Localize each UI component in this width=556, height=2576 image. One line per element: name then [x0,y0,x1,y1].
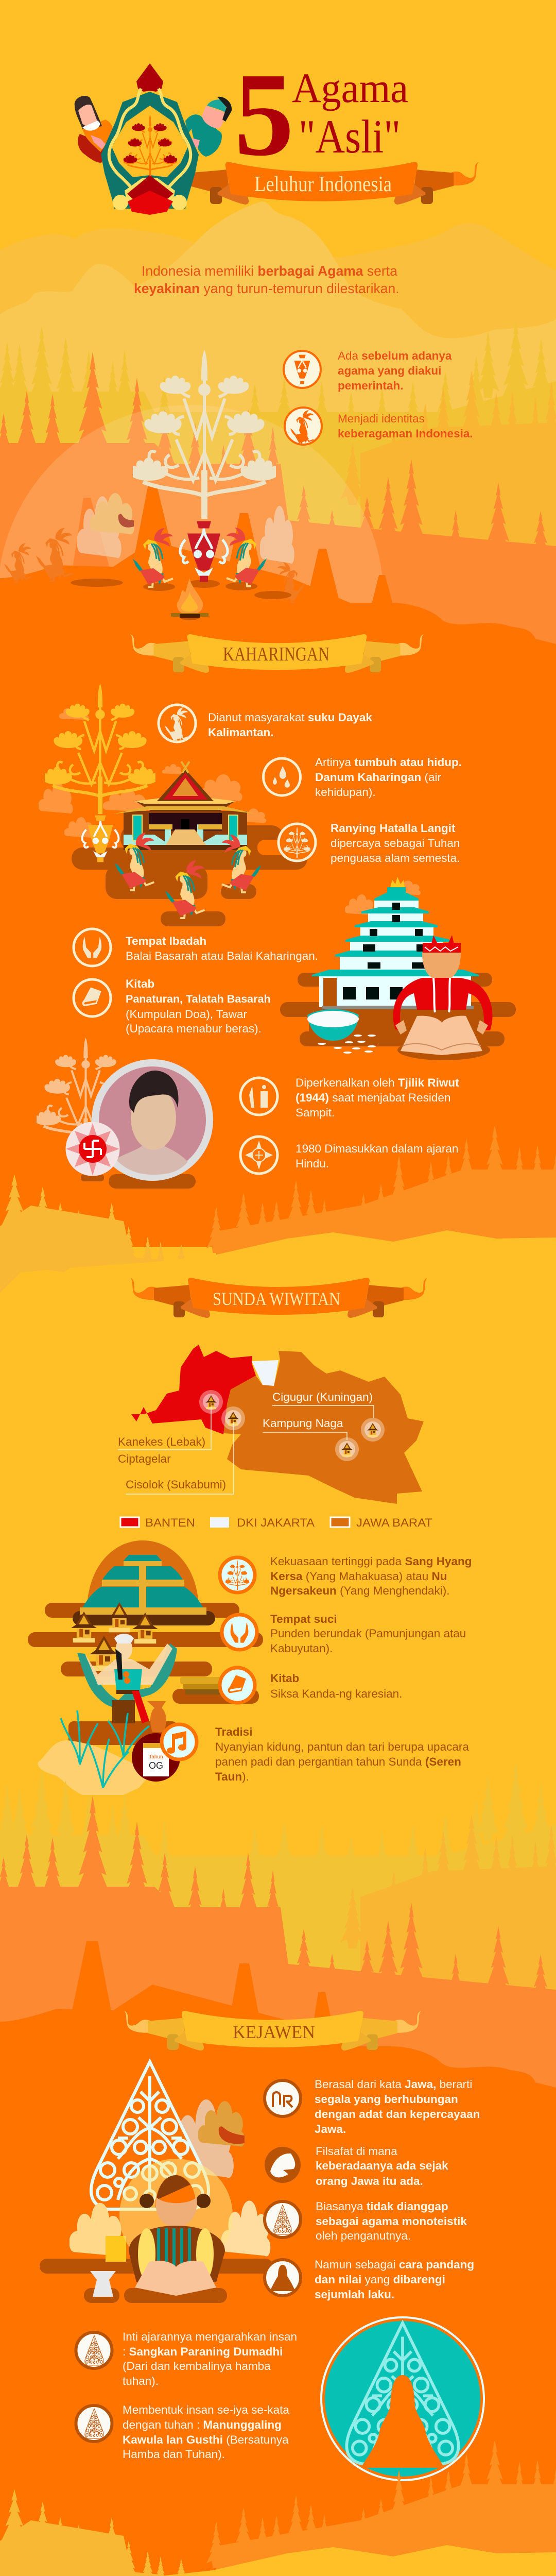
legend: DKI JAKARTA [237,1516,315,1529]
soft clouds [38,705,421,915]
text: holy place: Kabuyutan). [270,1642,333,1655]
map pins [199,1390,385,1461]
text: 1980 [296,1142,458,1170]
icon: gunungan [76,2405,112,2442]
map labels: Kanekes and Ciptagelar [118,1435,205,1465]
dancers [115,833,261,918]
text: scripture: (Kumpulan Doa), Tawar [126,1008,247,1021]
background: distant hills [0,223,556,464]
icon: Javanese script [265,2080,301,2116]
text: holy place: Tempat suci [270,1613,337,1625]
forest transition 1 [0,319,556,685]
text: introduced by: Sampit. [296,1106,335,1119]
background: front mountain [0,201,556,464]
icon: dancer [159,705,196,742]
map label: Cisolok: Cisolok (Sukabumi) [126,1478,226,1491]
text: highest power: Kekuasaan tertinggi pada Sang Hyang [270,1555,472,1568]
icon: hands [74,929,111,966]
text: place of worship [126,935,318,962]
text: meaning: Artinya tumbuh atau hidup. [315,756,462,769]
text: introduced by: (1944) saat menjabat Residen [296,1091,450,1104]
colored dancers [133,528,267,587]
text: worldview [315,2258,474,2301]
illustration: temple, priest, rice and book [280,877,516,1060]
background: yellow Sunda Wiwitan [0,1309,556,2030]
icon: gunungan [76,2332,112,2368]
title: Agama: Agama [292,64,408,111]
text: origin: segala yang berhubungan [315,2093,458,2106]
portrait of Tjilik Riwut [92,1059,213,1181]
silhouette dancers [4,528,305,602]
text: core teaching: : Sangkan Paraning Dumadhi [123,2345,283,2358]
forest transition 3 [0,1763,556,2129]
text: god: penguasa alam semesta. [331,852,460,865]
scene: opening ornament and dancers [4,350,305,620]
legend: BANTEN [145,1516,195,1529]
text: not monotheistic [316,2200,467,2242]
text: not monotheistic: Biasanya tidak dianggap [316,2200,448,2213]
text: not monotheistic: sebagai agama monoteistik [316,2215,467,2228]
map label: Kampung Naga: Kampung Naga [263,1417,343,1430]
text: tradition: Taun). [215,1770,249,1783]
text: scripture: Panaturan, Talatah Basarah [126,993,271,1005]
text: worldview: sejumlah laku. [315,2288,394,2301]
icon: wayang face [265,2147,301,2183]
campfire [171,578,208,620]
opening point 2 icon [285,408,322,445]
text: core teaching: (Dari dan kembalinya hamba [123,2360,271,2372]
text: worldview: dan nilai yang dibarengi [315,2273,445,2286]
map labels: Kanekes and Ciptagelar: Kanekes (Lebak) [118,1435,205,1448]
intro text: keyakinan yang turun-temurun dilestarikan. [134,281,399,296]
opening point 1 text: Ada sebelum adanya [338,349,452,362]
text: holy place [270,1613,466,1655]
yellow mask [82,816,118,862]
legend [120,1516,432,1529]
house towers [67,1941,335,2035]
dome glow [0,405,384,791]
opening point 1 text: agama yang diakui [338,364,441,377]
text: origin: Berasal dari kata Jawa, berarti [315,2078,472,2091]
text: highest power [270,1555,472,1597]
title banner: Leluhur Indonesia [254,173,392,196]
icon: book [74,979,111,1016]
icon: hands [222,1615,257,1650]
text: adherents: Kalimantan. [208,726,274,739]
text: core teaching: Inti ajarannya mengarahkan insan [123,2330,297,2343]
text: scripture: Siksa Kanda-ng karesian. [270,1687,402,1700]
illustration: punden, village and dancer: Tahun [149,1754,163,1760]
clouds of smoke [77,493,294,564]
text: meaning [315,756,462,799]
text: tradition: panen padi dan pergantian tahun Sunda (Seren [215,1755,461,1768]
banner: Sunda Wiwitan: SUNDA WIWITAN [213,1289,340,1309]
forest transition 4 [0,2440,556,2576]
opening point 1 text [338,349,452,392]
halo [119,2159,233,2272]
map label: Cigugur: Cigugur (Kuningan) [272,1391,373,1403]
text: tradition [215,1725,469,1783]
opening point 1 icon [284,351,321,388]
brown ground blobs [72,825,307,926]
brown blobs [40,2259,273,2303]
banner: Kaharingan: KAHARINGAN [223,643,329,665]
title banner [164,162,479,205]
title: Asli: "Asli" [299,110,401,163]
icon: book [220,1668,255,1703]
traditional longhouse [113,761,257,850]
text: meaning: kehidupan). [315,786,376,799]
title: numeral 5: 5 [234,48,294,181]
text: philosophy [316,2145,448,2188]
icon: ornament tree [279,824,316,861]
opening point 1 text: pemerintah. [338,379,404,392]
text: union with god: Kawula lan Gusthi (Bersatunya [123,2433,289,2446]
panel: Kaharingan [34,634,516,1189]
opening point 2 text: Menjadi identitas [338,412,425,425]
banner: Sunda Wiwitan [130,1278,427,1318]
text: god [331,822,460,865]
text: origin: dengan adat dan kepercayaan [315,2108,480,2121]
text: 1980: 1980 Dimasukkan dalam ajaran [296,1142,458,1155]
house towers [72,484,394,608]
shadows on the ground [71,579,291,599]
yellow ornament tree [42,684,158,814]
text: scripture: Kitab [126,977,154,990]
ground orange [0,1985,556,2124]
ground orange [0,541,556,680]
illustration: punden, village and dancer [28,1540,263,1795]
panel: Kejawen [40,2011,484,2480]
text: union with god: Membentuk insan se-iya se-kata [123,2403,289,2416]
text: union with god: Hamba dan Tuhan). [123,2448,225,2461]
text: meaning: Danum Kaharingan (air [315,771,442,784]
icon: podium [240,1078,277,1115]
map: West Java region [131,1345,424,1504]
text: tradition: Tradisi [215,1725,253,1738]
text: god: dipercaya sebagai Tuhan [331,837,460,850]
text: core teaching [123,2330,297,2387]
map labels: Kanekes and Ciptagelar: Ciptagelar [118,1452,171,1465]
banner: Kejawen: KEJAWEN [233,2022,315,2042]
forest transition 2 [0,1125,556,1319]
portrait base blobs [81,1174,196,1189]
opening point 2 text: keberagaman Indonesia. [338,427,473,440]
text: philosophy: Filsafat di mana [316,2145,397,2158]
text: origin [315,2078,480,2136]
intro text [134,263,399,296]
cream ornament tree [129,350,280,519]
intro text: Indonesia memiliki berbagai Agama serta [142,263,397,279]
incense burner [90,2271,116,2297]
gunungan ornament [101,63,199,215]
legend: JAWA BARAT [356,1516,432,1529]
text: origin: Jawa. [315,2123,346,2136]
text: scripture [126,977,271,1035]
panel: Sunda Wiwitan [28,1278,472,1795]
text: god: Ranying Hatalla Langit [331,822,456,835]
text: introduced by [296,1076,459,1119]
pale smoke figures [69,2200,270,2262]
text: highest power: Ngersakeun (Yang Menghendaki). [270,1584,450,1597]
icon: water [264,758,301,795]
text: adherents: Dianut masyarakat suku Dayak [208,711,372,724]
text: scripture: Kitab [270,1672,299,1685]
text: union with god: dengan tuhan : Manunggaling [123,2418,282,2431]
icon: ornament tree [220,1557,255,1592]
text: place of worship: Tempat Ibadah [126,935,206,947]
Hindu sun emblem [66,1122,119,1176]
banner: Kaharingan [130,634,424,673]
text: philosophy: orang Jawa itu ada. [316,2175,423,2188]
stacked palm leaf books [180,1677,222,1694]
text: highest power: Kersa (Yang Mahakuasa) atau Nu [270,1570,447,1583]
opening point 2 text [338,412,473,440]
text: holy place: Punden berundak (Pamunjungan atau [270,1627,466,1640]
text: scripture [270,1672,402,1700]
text: union with god [123,2403,289,2461]
figure: man [185,97,232,157]
text: worldview: Namun sebagai cara pandang [315,2258,474,2271]
text: introduced by: Diperkenalkan oleh Tjilik Riwut [296,1076,459,1089]
pale ornament tree behind portrait [34,1038,137,1151]
illustration: meditation in gunungan circle [321,2317,484,2480]
icon: gunungan [265,2201,301,2238]
banner: Kejawen [124,2011,421,2050]
text: not monotheistic: oleh penganutnya. [316,2229,411,2242]
illustration: gunungan and dalang [40,2061,273,2303]
icon: emblem [240,1137,277,1174]
map leader lines [118,1405,374,1494]
icon: meditation [265,2260,301,2296]
icon: music [162,1724,197,1759]
red mask [180,521,228,582]
background: yellow top [0,0,556,670]
text: 1980: Hindu. [296,1157,329,1170]
smoke and barong [169,2099,245,2178]
text: place of worship: Balai Basarah atau Balai Kaharingan. [126,950,318,962]
text: adherents [208,711,372,739]
text: tradition: Nyanyian kidung, pantun dan tari berupa upacara [215,1740,469,1753]
text: scripture: (Upacara menabur beras). [126,1022,262,1035]
gunungan [91,2061,208,2210]
figure: woman [75,96,113,163]
text: philosophy: keberadaanya ada sejak [316,2159,448,2172]
text: core teaching: tuhan). [123,2375,159,2387]
panel: opening title [75,48,479,215]
illustration: punden, village and dancer: OG [149,1760,163,1771]
dalang figure [129,2175,225,2296]
